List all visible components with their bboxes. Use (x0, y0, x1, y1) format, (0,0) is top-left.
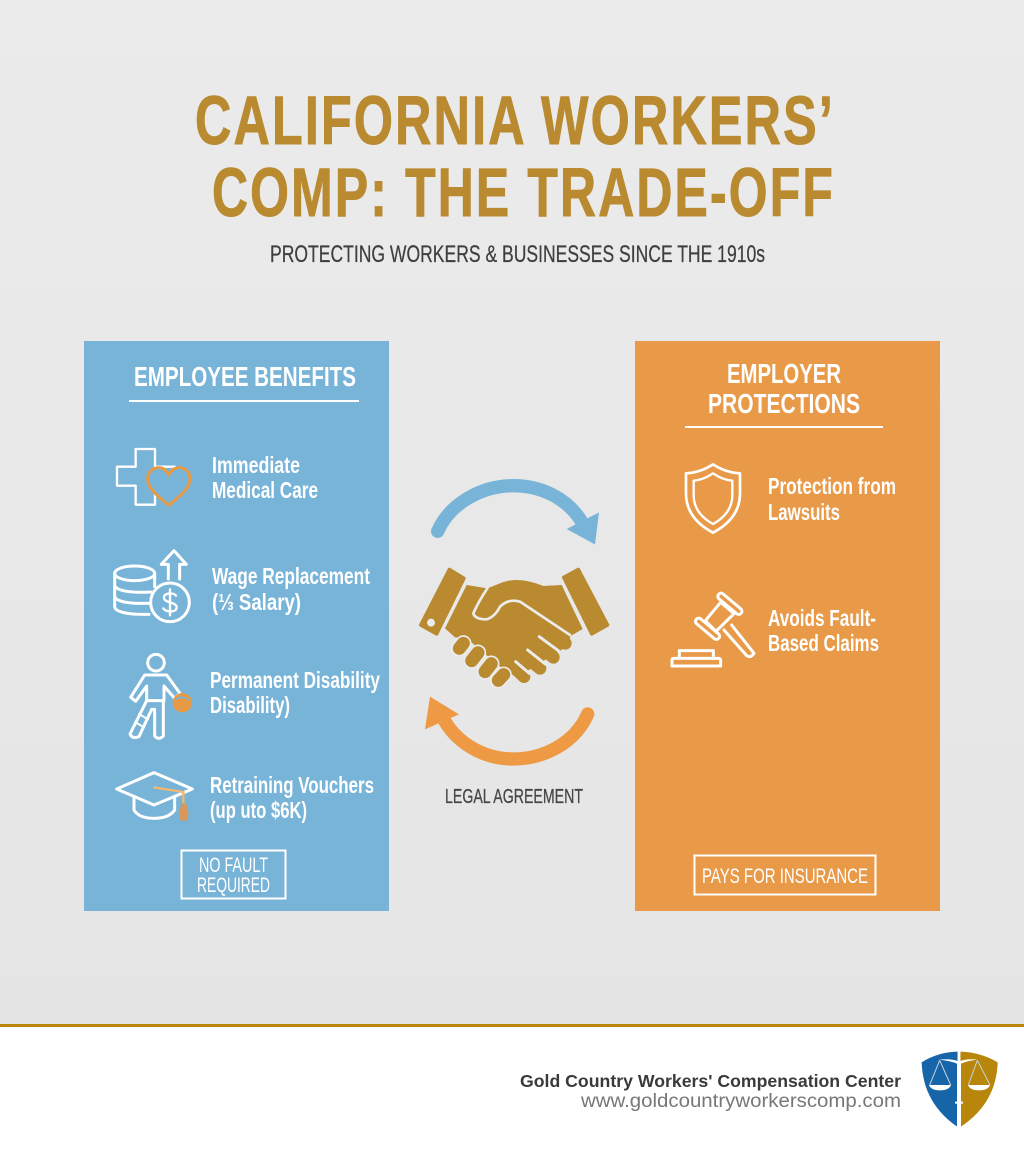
text: immediate medical care (212, 452, 318, 503)
arrow: orange, employee to employer (425, 697, 588, 759)
text: avoids fault-based claims: Avoids Fault- (768, 605, 876, 631)
arrow: blue, employer to employee (438, 486, 599, 544)
panel: employer protections (635, 341, 940, 911)
text: permanent disability: Disability) (210, 692, 290, 718)
heading: employee benefits: EMPLOYEE BENEFITS (134, 361, 356, 392)
callout: no fault required: REQUIRED (197, 874, 270, 897)
text: protection from lawsuits: Protection from (768, 473, 896, 499)
icon: handshake (421, 569, 608, 680)
callout: no fault required (182, 850, 286, 898)
label: legal agreement: LEGAL AGREEMENT (445, 786, 583, 808)
panel: employee benefits (84, 341, 389, 911)
icon: graduation cap (117, 773, 192, 821)
footer: organisation name and url: Gold Country Workers' Compensation Center (520, 1071, 901, 1091)
icon: shield (686, 464, 740, 533)
text: retraining vouchers: (up uto $6K) (210, 797, 307, 823)
icon: injured person (130, 654, 192, 738)
callout: pays for insurance (694, 856, 876, 894)
logo: shield with scales (922, 1052, 998, 1127)
text: wage replacement: Wage Replacement (212, 563, 370, 589)
text: wage replacement (212, 563, 370, 615)
text: wage replacement: (⅓ Salary) (212, 589, 301, 615)
text: permanent disability (210, 667, 380, 718)
heading: employer protections (708, 358, 860, 419)
icon: medical cross and heart (117, 449, 190, 505)
text: retraining vouchers: Retraining Vouchers (210, 772, 374, 798)
heading: employer protections: EMPLOYER (727, 358, 841, 389)
text: immediate medical care: Immediate (212, 452, 300, 478)
icon: gavel (672, 592, 754, 666)
text: protection from lawsuits: Lawsuits (768, 499, 840, 525)
footer: organisation name and url: www.goldcountryworkerscomp.com (580, 1091, 901, 1112)
text: protection from lawsuits (768, 473, 896, 525)
title (195, 82, 835, 231)
callout: pays for insurance: PAYS FOR INSURANCE (702, 865, 868, 888)
callout: no fault required: NO FAULT (199, 854, 268, 877)
footer: organisation name and url (520, 1071, 901, 1112)
heading: employer protections: PROTECTIONS (708, 388, 860, 419)
center: exchange arrows and handshake (421, 486, 608, 759)
text: permanent disability: Permanent Disability (210, 667, 380, 693)
icon: coins and dollar (115, 551, 189, 622)
text: avoids fault-based claims (768, 605, 879, 656)
text: avoids fault-based claims: Based Claims (768, 630, 879, 656)
subtitle: PROTECTING WORKERS & BUSINESSES SINCE THE 1910s (270, 241, 765, 268)
text: retraining vouchers (210, 772, 374, 823)
text: immediate medical care: Medical Care (212, 477, 318, 503)
